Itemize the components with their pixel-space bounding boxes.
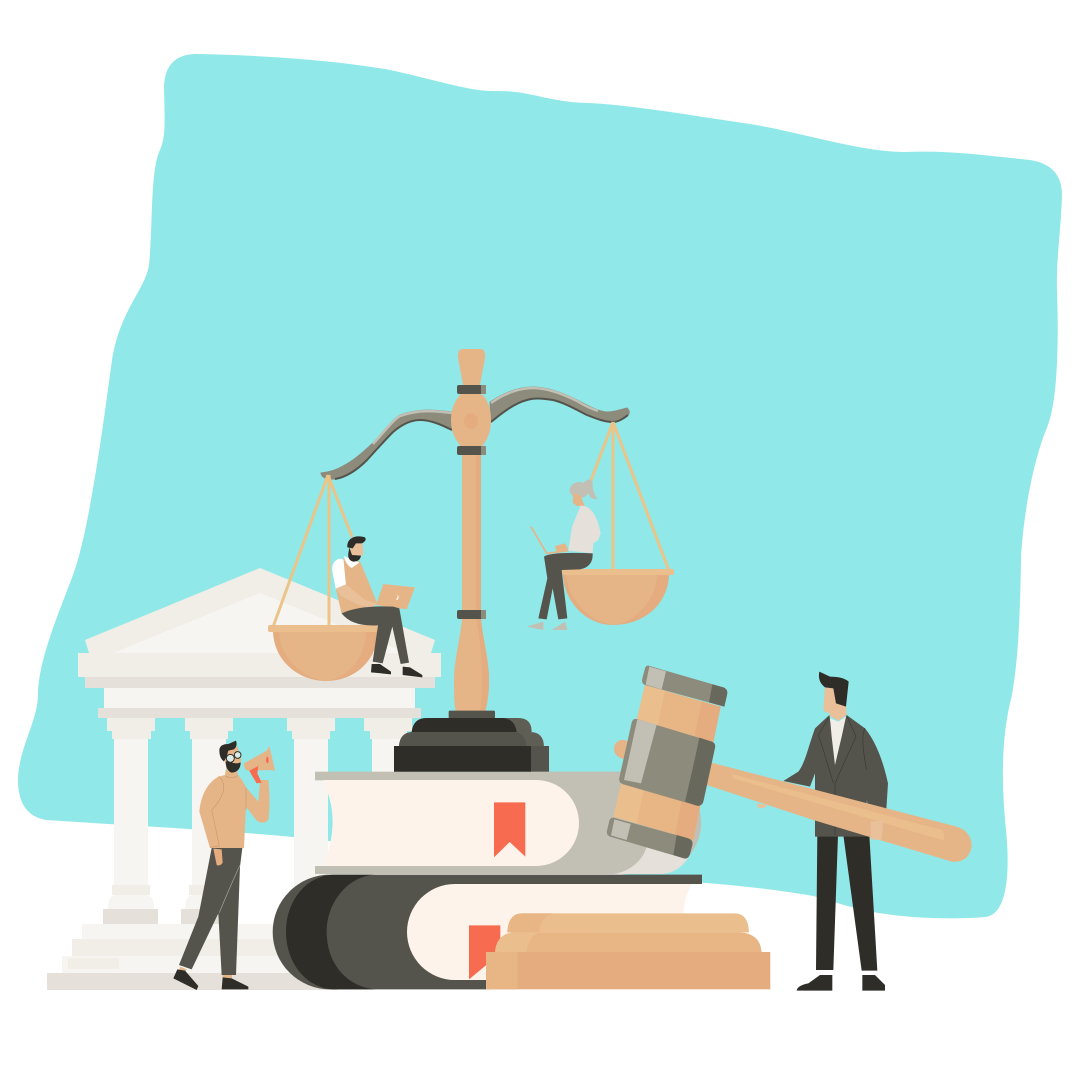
- right pan rim: [562, 569, 674, 575]
- man vest: [336, 558, 377, 614]
- neck and face: [823, 687, 847, 721]
- trousers highlight: [219, 865, 240, 913]
- man arm: [336, 584, 377, 607]
- woman face: [573, 493, 585, 506]
- top book highlight: [613, 847, 690, 874]
- gavel head wood: [613, 685, 721, 840]
- pocket hand: [213, 849, 223, 865]
- top book pages: [323, 780, 579, 866]
- neck: [225, 770, 238, 778]
- woman trousers: [538, 553, 593, 619]
- person: man with megaphone: [173, 741, 275, 990]
- law books stack: [273, 772, 702, 989]
- top book cover: [315, 772, 701, 874]
- woman arm: [555, 543, 568, 552]
- temple columns: [103, 718, 412, 924]
- suit shirt: [830, 717, 846, 765]
- megaphone man trousers: [179, 848, 242, 975]
- suit shoes: [797, 975, 885, 991]
- left scale pan with strings: [268, 475, 378, 681]
- megaphone man face: [223, 747, 241, 770]
- scale: central column and beam: [321, 349, 629, 712]
- left pan inner bowl: [279, 630, 366, 681]
- hand over handle: [871, 820, 883, 840]
- megaphone man beard: [226, 761, 241, 773]
- gavel middle band: [619, 719, 715, 806]
- block base: [486, 952, 770, 989]
- column rings: [457, 385, 486, 619]
- bottom book bookmark: [469, 925, 500, 979]
- right pan strings: [590, 422, 669, 571]
- temple entablature: [78, 653, 441, 718]
- base middle tier: [399, 732, 544, 746]
- suit hair: [819, 672, 849, 707]
- gavel wood highlight: [613, 685, 665, 823]
- man sleeves: [332, 559, 370, 592]
- person: man with laptop on left pan: [332, 536, 422, 677]
- scale column: [451, 349, 491, 712]
- jacket lapel lines: [818, 716, 867, 835]
- woman shoes: [527, 622, 567, 630]
- bottom book pages: [407, 884, 692, 980]
- gavel: [607, 666, 972, 862]
- block top tier left: [507, 913, 553, 932]
- block base left: [486, 952, 518, 989]
- base ring: [449, 711, 495, 719]
- base middle tier inner: [399, 732, 527, 746]
- man trousers: [342, 606, 409, 664]
- woman hair: [570, 482, 589, 498]
- column knob: [464, 413, 478, 429]
- ankles: [179, 967, 232, 978]
- bottom book cover: [273, 875, 702, 989]
- sweater: [199, 775, 269, 848]
- base upper tier: [412, 718, 532, 732]
- gavel handle: [614, 740, 972, 862]
- left pan bowl: [273, 630, 378, 681]
- right pan bowl: [563, 573, 669, 625]
- bottom book spine band: [286, 875, 375, 989]
- handle highlight: [732, 774, 944, 840]
- temple steps: [47, 924, 337, 990]
- megaphone man shoes: [173, 969, 248, 990]
- person: woman with laptop on right pan: [527, 480, 601, 630]
- block top tier: [507, 913, 749, 932]
- temple pediment: [85, 568, 435, 653]
- megaphone man hair: [219, 741, 237, 762]
- hand behind handle: [757, 803, 767, 808]
- person: man in suit holding gavel: [757, 672, 888, 991]
- block middle tier left: [495, 932, 543, 952]
- glasses: [226, 752, 241, 762]
- block middle tier: [495, 932, 762, 952]
- base lower tier dark: [394, 746, 531, 772]
- megaphone: [244, 746, 275, 783]
- sweater detail lines: [210, 775, 246, 847]
- woman ponytail: [583, 480, 597, 499]
- base lower tier: [394, 746, 549, 772]
- gavel wood shade: [675, 702, 721, 840]
- scale beam: [321, 387, 629, 479]
- gavel sound block: [486, 913, 770, 989]
- left pan strings: [273, 475, 352, 627]
- temple building: [47, 568, 441, 990]
- base upper tier dark: [412, 718, 517, 732]
- suit jacket: [783, 715, 888, 837]
- column shading: [476, 454, 489, 712]
- gavel bottom band: [607, 818, 692, 858]
- right pan inner bowl: [566, 573, 657, 625]
- background: turquoise blob: [18, 54, 1062, 918]
- scale base: [394, 711, 549, 772]
- man face: [349, 542, 363, 561]
- suit trousers: [816, 835, 877, 971]
- left pan rim: [268, 625, 378, 632]
- woman laptop: [531, 527, 568, 553]
- gavel top band: [642, 666, 727, 707]
- right scale pan with strings: [562, 422, 674, 625]
- man hair: [347, 536, 366, 548]
- man collar: [344, 556, 359, 568]
- woman sweater: [568, 506, 601, 553]
- laptop: [376, 584, 415, 609]
- man beard: [348, 547, 361, 562]
- top book bookmark: [494, 802, 525, 857]
- man shoes: [371, 664, 422, 677]
